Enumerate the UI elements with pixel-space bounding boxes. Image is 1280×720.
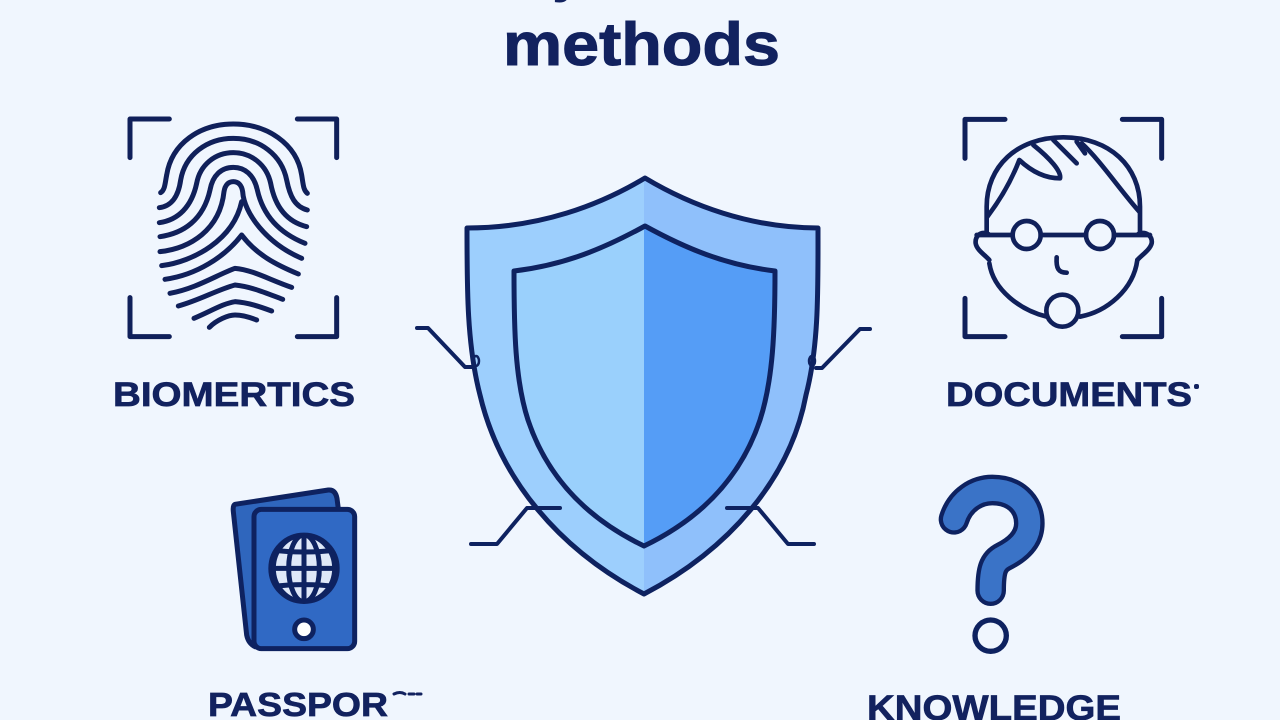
fingerprint scan brackets — [130, 119, 337, 337]
shield inner panel — [514, 226, 775, 546]
face outline and features — [976, 137, 1152, 327]
icon: face scan — [965, 119, 1162, 337]
face scan brackets — [965, 119, 1162, 337]
question mark dot — [975, 620, 1006, 651]
fingerprint ridges — [159, 124, 307, 327]
question mark hook — [954, 490, 1029, 591]
passport back cover — [233, 490, 339, 647]
label: biometrics: BIOMERTICS — [113, 376, 355, 414]
icon: fingerprint — [130, 119, 337, 337]
passport chip — [295, 620, 313, 639]
icon: central shield — [417, 178, 870, 594]
globe emblem — [270, 535, 338, 602]
shield outer band — [467, 178, 818, 594]
title: methods — [503, 11, 780, 78]
icon: passport — [233, 490, 355, 649]
icon: question mark — [954, 490, 1029, 651]
label: documents: DOCUMENTS — [946, 376, 1192, 414]
shield circuit connectors — [417, 328, 870, 544]
passport front cover — [254, 509, 355, 649]
title — [384, 0, 897, 78]
